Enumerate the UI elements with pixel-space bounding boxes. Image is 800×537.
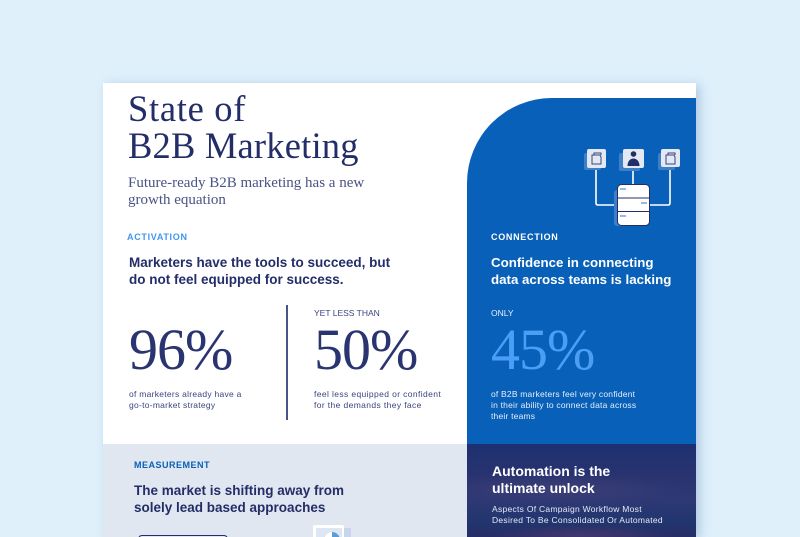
heading: connection: data across teams is lacking xyxy=(491,272,671,287)
caption: 45% xyxy=(491,389,636,421)
icon: pie chart card xyxy=(313,525,351,537)
caption: 96%: of marketers already have a xyxy=(129,389,242,399)
subheading: automation xyxy=(492,504,663,525)
title: State of xyxy=(128,88,246,129)
stat: 45%: 45% xyxy=(491,317,594,382)
caption: 96% xyxy=(129,389,242,410)
heading: connection: Confidence in connecting xyxy=(491,255,654,270)
caption: 45%: of B2B marketers feel very confident xyxy=(491,389,635,399)
heading: activation: Marketers have the tools to succeed, but xyxy=(129,255,390,270)
title xyxy=(128,88,359,166)
icon: data connection diagram xyxy=(584,149,680,226)
caption: 45%: their teams xyxy=(491,411,535,421)
divider xyxy=(286,305,288,420)
subtitle: growth equation xyxy=(128,192,226,208)
stat: 96%: 96% xyxy=(129,317,232,382)
heading: automation: Automation is the xyxy=(492,463,610,479)
heading: automation: ultimate unlock xyxy=(492,480,595,496)
heading: automation xyxy=(492,463,610,496)
subheading: automation: Aspects Of Campaign Workflow Most xyxy=(492,504,642,514)
heading: measurement xyxy=(134,483,344,515)
title: B2B Marketing xyxy=(128,125,359,166)
heading: activation: do not feel equipped for success. xyxy=(129,272,344,287)
panel: connection xyxy=(467,98,696,444)
label: measurement: MEASUREMENT xyxy=(134,460,210,470)
subtitle: Future-ready B2B marketing has a new xyxy=(128,175,364,191)
heading: measurement: solely lead based approaches xyxy=(134,500,325,515)
label: only: ONLY xyxy=(491,308,514,318)
heading: activation xyxy=(129,255,390,287)
caption: 50% xyxy=(314,389,441,410)
chart box outline xyxy=(138,535,228,537)
stat: 50%: 50% xyxy=(314,317,417,382)
heading: measurement: The market is shifting away from xyxy=(134,483,344,498)
caption: 50%: feel less equipped or confident xyxy=(314,389,441,399)
subheading: automation: Desired To Be Consolidated Or Automated xyxy=(492,515,663,525)
subtitle xyxy=(128,175,364,208)
heading: connection xyxy=(491,255,671,287)
label: activation: ACTIVATION xyxy=(127,232,188,242)
label: connection: CONNECTION xyxy=(491,232,558,242)
caption: 96%: go-to-market strategy xyxy=(129,400,215,410)
caption: 45%: in their ability to connect data across xyxy=(491,400,636,410)
panel: automation background xyxy=(467,444,696,537)
caption: 50%: for the demands they face xyxy=(314,400,422,410)
report card xyxy=(103,83,696,537)
panel: measurement xyxy=(103,444,467,537)
label: yet less than: YET LESS THAN xyxy=(314,308,380,318)
